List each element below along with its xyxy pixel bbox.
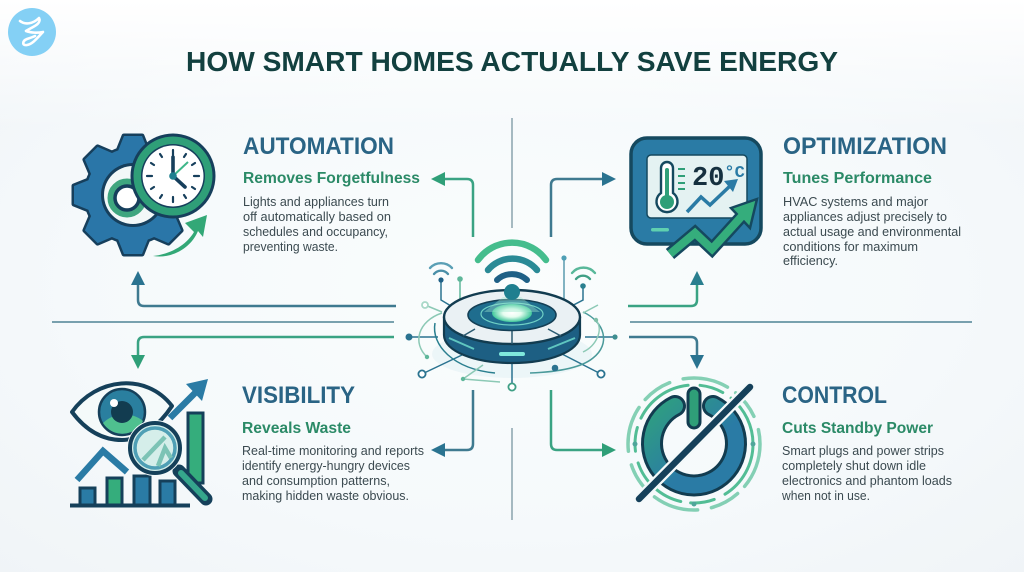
panel: automation xyxy=(74,133,420,256)
zigzag line xyxy=(77,451,127,480)
clock xyxy=(130,134,216,218)
body: visibility: making hidden waste obvious. xyxy=(242,489,409,503)
body: control xyxy=(781,444,952,503)
heading: control: CONTROL xyxy=(782,382,887,409)
arrow: hub to control lower xyxy=(551,390,616,457)
blue trend arrow xyxy=(687,179,738,212)
subheading: visibility: Reveals Waste xyxy=(242,420,351,437)
body: automation: preventing waste. xyxy=(243,240,338,254)
logo badge xyxy=(8,8,56,56)
heading: automation: AUTOMATION xyxy=(243,133,394,160)
body: control: electronics and phantom loads xyxy=(782,474,952,488)
hub inner ring xyxy=(481,303,543,325)
hub light bar xyxy=(499,352,525,356)
rising arrow xyxy=(170,379,208,418)
device frame xyxy=(631,138,761,244)
heading: optimization: OPTIMIZATION xyxy=(783,133,947,160)
gear xyxy=(74,136,192,254)
body: control: completely shut down idle xyxy=(782,459,926,473)
arrow: hub to control xyxy=(629,337,704,369)
ring nodes xyxy=(632,442,756,506)
body: optimization: appliances adjust precisely to xyxy=(783,210,947,224)
panel: visibility xyxy=(70,379,424,506)
main wifi arcs xyxy=(478,243,546,280)
body: optimization: efficiency. xyxy=(783,254,838,268)
body: automation xyxy=(243,195,391,254)
icon: smart thermostat xyxy=(631,138,761,254)
hub plate ticks xyxy=(463,329,561,344)
hub circuit traces xyxy=(409,258,615,387)
central smart hub xyxy=(406,243,618,391)
small wifi right xyxy=(572,268,595,289)
temperature reading: °C xyxy=(724,164,745,183)
body: automation: off automatically based on xyxy=(243,210,391,224)
body: visibility xyxy=(242,444,424,503)
arrow: hub to optimization xyxy=(551,172,616,237)
subheading: automation: Removes Forgetfulness xyxy=(243,170,420,187)
body: control: Smart plugs and power strips xyxy=(782,444,944,458)
temperature reading: 20 xyxy=(692,164,724,194)
power bar xyxy=(688,388,700,428)
arrow: hub to visibility xyxy=(131,337,394,369)
outer dashed rings xyxy=(628,378,760,510)
arrow: hub to visibility lower xyxy=(431,390,473,457)
hub glowing core xyxy=(492,304,532,322)
subheading: control: Cuts Standby Power xyxy=(782,420,933,437)
green growth arrow xyxy=(153,215,207,256)
hub signal ball xyxy=(504,284,520,300)
subheading: optimization: Tunes Performance xyxy=(783,170,932,187)
bar chart xyxy=(70,413,203,506)
status light xyxy=(651,228,669,232)
panel: control xyxy=(628,378,952,510)
body: optimization xyxy=(783,195,961,268)
hub light beam xyxy=(484,297,540,312)
body: control: when not in use. xyxy=(781,489,870,503)
heading: visibility: VISIBILITY xyxy=(242,382,355,409)
arrow: hub to optimization lower xyxy=(628,271,704,306)
icon: eye chart and magnifier xyxy=(70,379,208,506)
hub base body xyxy=(444,318,580,363)
thermometer xyxy=(656,162,685,212)
body: optimization: HVAC systems and major xyxy=(783,195,928,209)
hub top plate xyxy=(444,290,580,344)
small wifi left xyxy=(430,263,452,283)
panel: optimization xyxy=(631,133,961,268)
body: optimization: conditions for maximum xyxy=(783,240,918,254)
icon: gear and clock xyxy=(74,134,216,256)
slash xyxy=(639,387,750,499)
arrow: hub to automation lower xyxy=(131,271,396,306)
green trend arrow xyxy=(670,199,757,254)
hub shadow xyxy=(432,330,592,378)
body: optimization: actual usage and environmental xyxy=(783,225,961,239)
icon: crossed power symbol xyxy=(628,378,760,510)
hub side lights xyxy=(449,338,575,349)
eye xyxy=(72,383,172,440)
body: automation: schedules and occupancy, xyxy=(243,225,388,239)
device screen xyxy=(647,155,747,218)
magnifying glass xyxy=(127,420,206,499)
power ring xyxy=(652,406,736,485)
divider lines xyxy=(52,118,972,520)
hub inner disc xyxy=(468,300,556,330)
body: visibility: identify energy-hungry devices xyxy=(242,459,410,473)
body: automation: Lights and appliances turn xyxy=(243,195,389,209)
body: visibility: and consumption patterns, xyxy=(242,474,390,488)
arrow: hub to automation xyxy=(431,172,473,237)
body: visibility: Real-time monitoring and reports xyxy=(242,444,424,458)
hub circuit nodes xyxy=(406,255,618,391)
title: HOW SMART HOMES ACTUALLY SAVE ENERGY xyxy=(186,46,838,77)
